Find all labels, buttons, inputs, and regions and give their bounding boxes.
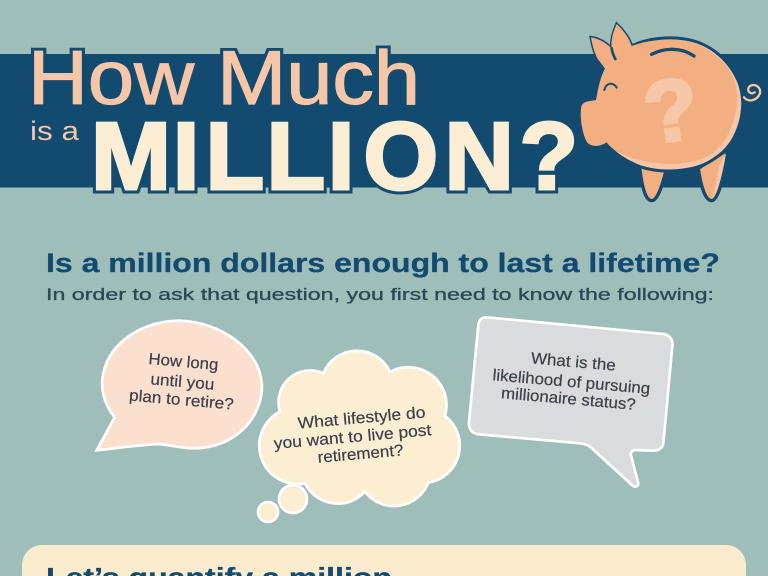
thought bubble: lifestyle: retirement? <box>317 442 404 467</box>
speech bubble: retire: until you <box>150 371 215 394</box>
speech bubble: millionaire status: likelihood of pursuing <box>492 367 651 398</box>
thought bubble: lifestyle: What lifestyle do <box>297 404 426 433</box>
speech bubble: retire: plan to retire? <box>128 387 235 414</box>
thought bubble: lifestyle <box>258 351 460 522</box>
speech bubble: millionaire status: What is the <box>530 350 617 375</box>
speech bubble: retire <box>97 321 262 450</box>
title <box>28 36 578 210</box>
thought bubble: lifestyle: you want to live post <box>273 422 433 453</box>
title: How Much <box>28 36 420 121</box>
title: MILLION? <box>91 103 578 210</box>
speech bubble: retire: How long <box>148 351 219 374</box>
subheading: In order to ask that question, you first need to know the following: <box>46 285 714 304</box>
title: is a <box>30 116 80 146</box>
heading: main question: Is a million dollars enough to last a lifetime? <box>46 248 720 278</box>
title: How Much <box>28 36 420 121</box>
icon: piggy bank: ? <box>638 58 704 163</box>
speech bubble: millionaire status: millionaire status? <box>500 385 636 414</box>
icon: piggy bank <box>580 24 760 201</box>
panel: quantify a million <box>22 545 746 576</box>
speech bubble: millionaire status <box>469 317 672 487</box>
header band <box>0 54 768 188</box>
title: MILLION? <box>91 103 578 210</box>
